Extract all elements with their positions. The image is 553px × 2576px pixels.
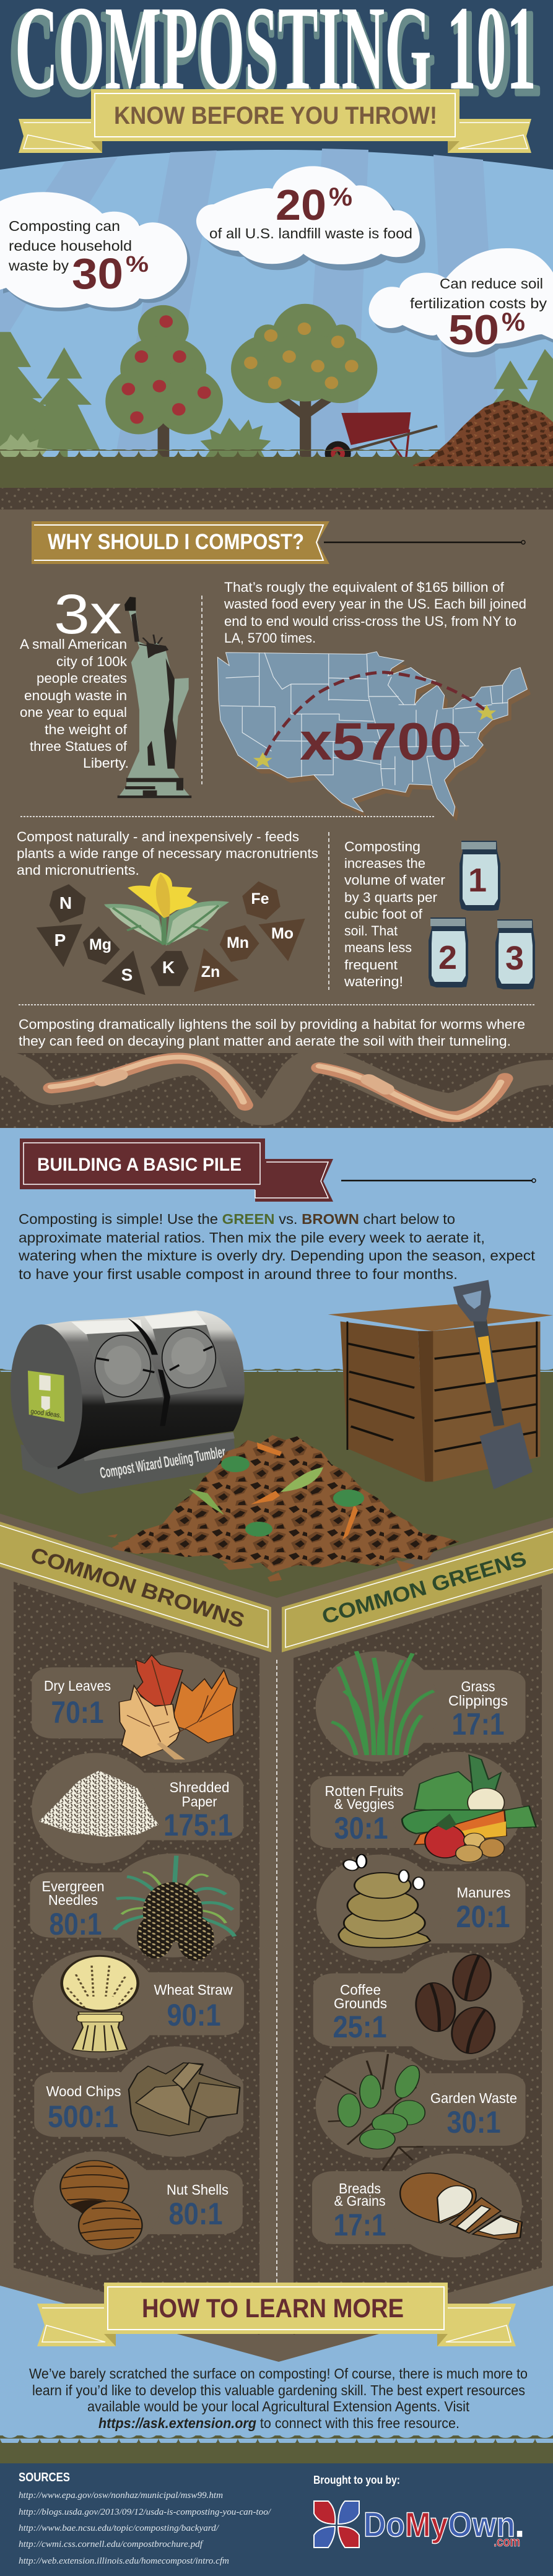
cloud: fertilization stat: [369, 248, 553, 357]
item: evergreen needles: Evergreen: [42, 1878, 104, 1894]
panel: browns dotted background: [14, 1582, 259, 2335]
text: water volume: means less: [344, 940, 412, 955]
text: bills end to end: That’s rougly the equivalent of $165 billion of: [224, 579, 505, 595]
ground strip: [0, 449, 553, 488]
item: rotten fruits and veggies: 30:1: [334, 1811, 388, 1845]
carrots and greens: [189, 1442, 364, 1540]
cloud: household waste stat: [0, 192, 190, 311]
cloud: landfill stat: %: [329, 182, 352, 211]
sources list: http://cwmi.css.cornell.edu/compostbrochure.pdf: [19, 2539, 204, 2549]
diagram: flower and nutrient stones: Fe: [251, 890, 269, 908]
icon: apple tree: [105, 305, 223, 462]
sky: building section: [0, 1128, 553, 1376]
item: shredded paper: [39, 1771, 233, 1842]
text: bills end to end: [224, 579, 526, 646]
stat: statue of liberty: one year to equal: [20, 705, 127, 720]
item: coffee grounds: Grounds: [334, 1995, 387, 2011]
item: shredded paper: 175:1: [163, 1808, 233, 1842]
sources list: http://blogs.usda.gov/2013/09/12/usda-is-composting-you-can-too/: [19, 2507, 272, 2517]
dashed vertical divider: [201, 596, 202, 784]
text: water volume: soil. That: [344, 923, 398, 939]
text: water volume: by 3 quarts per: [344, 890, 437, 905]
icon: leaf pile: [107, 1435, 459, 1582]
item: shredded paper: Shredded: [170, 1779, 229, 1795]
ground: building section: [0, 1369, 553, 1613]
arc: NY to LA: [265, 672, 485, 755]
ribbon: know before you throw: [19, 89, 531, 153]
soil strip with worms: [0, 1053, 553, 1128]
item: dry leaves: [44, 1655, 237, 1759]
panel: why should I compost: [0, 510, 553, 1053]
icon: jar 3: [495, 919, 535, 989]
stat: statue of liberty: city of 100k: [56, 654, 128, 669]
heading banner: building a basic pile: BUILDING A BASIC PILE: [37, 1155, 242, 1175]
item: garden waste: [324, 2054, 517, 2170]
diagram: flower and nutrient stones: S: [121, 965, 133, 984]
header background: [0, 0, 553, 186]
item: breads and grains: Breads: [339, 2180, 381, 2197]
item: nut shells: [60, 2161, 229, 2250]
text: composting is simple: approximate material ratios. Then mix the pile every week to aerate it,: [19, 1229, 485, 1246]
item: breads and grains: [333, 2173, 522, 2242]
text: water volume: cubic foot of: [344, 906, 423, 922]
text: worms: they can feed on decaying plant matter and aerate the soil with their tunneling.: [19, 1033, 511, 1049]
item: coffee grounds: Coffee: [340, 1982, 381, 1998]
heading banner: building a basic pile: [20, 1138, 536, 1202]
cloud: household waste stat: waste by: [8, 258, 69, 274]
worm tunnel: [0, 1060, 553, 1113]
cloud: landfill stat: 20: [276, 181, 326, 229]
logo: DoMyOwn: .com: [494, 2534, 520, 2549]
ribbon: common greens: COMMON GREENS: [320, 1547, 529, 1629]
icon: flower: [104, 872, 229, 946]
item: evergreen needles: Needles: [48, 1892, 98, 1908]
cloud: household waste stat: Composting can: [9, 218, 120, 234]
stat: statue of liberty: Liberty.: [83, 755, 129, 771]
ribbon: how to learn more: HOW TO LEARN MORE: [142, 2294, 404, 2323]
icon: compost tumbler: [5, 1311, 245, 1494]
icon: jar 2: [429, 917, 468, 987]
icon: jar 3: 3: [505, 940, 524, 977]
icon: compost heap: [413, 400, 553, 466]
text: water volume: increases the: [344, 856, 425, 871]
cloud: fertilization stat: Can reduce soil: [440, 275, 543, 292]
text: composting is simple: Composting is simple! Use the GREEN vs. BROWN chart below to: [19, 1211, 455, 1227]
icon: jar 1: [459, 841, 500, 911]
icon: jar 1: 1: [468, 862, 487, 899]
text: learn more paragraph: available would be your local Agricultural Extension Agents. Visit: [87, 2398, 470, 2414]
item: garden waste: Garden Waste: [430, 2090, 517, 2106]
diagram: flower and nutrient stones: [37, 872, 305, 995]
item: wood chips: [46, 2063, 240, 2136]
text: nutrients: [17, 829, 318, 878]
text: composting is simple: watering when the mixture is overly dry. Depending upon the season, expect: [18, 1247, 536, 1264]
panel: greens dotted background: [294, 1585, 542, 2335]
logo: DoMyOwn: DoMyOwn.: [364, 2505, 524, 2544]
text: nutrients: and micronutrients.: [17, 862, 139, 878]
icon: wooden compost bin: [328, 1304, 553, 1481]
icon: statue: [118, 597, 191, 798]
text: worms: Composting dramatically lightens the soil by providing a habitat for worms where: [19, 1017, 525, 1032]
soil strip: [0, 488, 553, 510]
text: nutrients: Compost naturally - and inexpensively - feeds: [17, 829, 299, 844]
icon: shovel: [453, 1280, 533, 1490]
sources list: http://www.epa.gov/osw/nonhaz/municipal/msw99.htm: [19, 2491, 223, 2500]
ground: bottom: [0, 2435, 553, 2464]
cloud: fertilization stat: fertilization costs by: [410, 295, 547, 311]
stat: statue of liberty: A small American: [20, 636, 127, 652]
cloud: fertilization stat: 50: [448, 306, 499, 353]
stat: statue of liberty: 3x: [54, 584, 122, 646]
icon: compost tumbler: Compost Wizard Dueling Tumbler: [98, 1443, 227, 1482]
item: garden waste: 30:1: [447, 2105, 500, 2140]
item: grass clippings: [331, 1651, 508, 1755]
item: wheat straw: [60, 1955, 233, 2052]
worm 1: [51, 1057, 245, 1105]
map: United States x5700: [217, 652, 531, 821]
item: rotten fruits and veggies: Rotten Fruits: [324, 1783, 404, 1799]
ribbon: common greens: [282, 1528, 553, 1652]
text: bills end to end: end to end would criss-cross the US, from NY to: [224, 614, 516, 629]
item: nut shells: Nut Shells: [167, 2182, 229, 2198]
icon: compost tumbler: good ideas.: [30, 1408, 62, 1420]
item: evergreen needles: 80:1: [50, 1907, 102, 1941]
diagram: flower and nutrient stones: Mg: [89, 936, 111, 953]
item: shredded paper: Paper: [182, 1793, 217, 1810]
item: dry leaves: 70:1: [51, 1695, 104, 1730]
landscape: trees and wheelbarrow: [0, 304, 553, 466]
brought to you by: Brought to you by:: [313, 2474, 400, 2486]
text: bills end to end: wasted food every year in the US. Each bill joined: [224, 596, 526, 612]
item: wheat straw: Wheat Straw: [154, 1982, 233, 1998]
item: evergreen needles: [42, 1855, 235, 1961]
sources list: http://www.bae.ncsu.edu/topic/composting/backyard/: [19, 2523, 220, 2533]
heading banner: [32, 521, 525, 564]
worm 2: [319, 1066, 505, 1117]
text: composting is simple: to have your first usable compost in around three to four months.: [19, 1266, 458, 1282]
text: water volume: frequent: [344, 957, 398, 973]
item: grass clippings: Grass: [461, 1678, 495, 1694]
diagram: flower and nutrient stones: Mo: [271, 925, 294, 942]
text: worms: [19, 1017, 525, 1049]
item: rotten fruits and veggies: & Veggies: [334, 1796, 394, 1812]
sky with sun rays: [0, 149, 553, 461]
text: learn more paragraph: https://ask.extension.org to connect with this free resource.: [98, 2415, 459, 2431]
icon: wheelbarrow: [325, 412, 437, 466]
item: grass clippings: 17:1: [452, 1707, 504, 1741]
text: learn more paragraph: [29, 2366, 528, 2431]
diagram: flower and nutrient stones: K: [162, 958, 175, 977]
text: bills end to end: LA, 5700 times.: [224, 630, 316, 646]
sources list: [19, 2471, 272, 2566]
ribbon: know before you throw: KNOW BEFORE YOU THROW!: [114, 102, 437, 129]
item: manures: [339, 1855, 510, 1948]
cloud: fertilization stat: %: [502, 307, 525, 336]
item: breads and grains: 17:1: [333, 2208, 386, 2242]
map: United States x5700: x5700: [300, 713, 462, 771]
panel: browns and greens backing: [0, 1514, 553, 2362]
text: water volume: Composting: [344, 839, 420, 854]
item: nut shells: 80:1: [168, 2197, 223, 2231]
logo: DoMyOwn: [314, 2501, 524, 2549]
cloud: household waste stat: reduce household: [9, 238, 132, 254]
stat: statue of liberty: the weight of: [45, 722, 128, 737]
text: composting is simple: [18, 1211, 536, 1282]
heading banner: WHY SHOULD I COMPOST?: [48, 530, 304, 554]
item: wood chips: Wood Chips: [46, 2083, 121, 2099]
item: coffee grounds: 25:1: [333, 2010, 386, 2044]
ribbon: how to learn more: [37, 2283, 516, 2346]
item: coffee grounds: [333, 1954, 499, 2055]
item: dry leaves: Dry Leaves: [44, 1678, 111, 1694]
stat: statue of liberty: [20, 584, 191, 798]
text: water volume: watering!: [344, 974, 403, 989]
text: nutrients: plants a wide range of necessary macronutrients: [17, 846, 318, 861]
icon: orange tree: [231, 304, 377, 462]
stat: statue of liberty: enough waste in: [24, 688, 127, 703]
item: wheat straw: 90:1: [167, 1998, 220, 2032]
item: grass clippings: Clippings: [448, 1693, 508, 1709]
cloud: landfill stat: [196, 166, 425, 271]
text: learn more paragraph: learn if you’d like to develop this valuable gardening skill. The best expert resources: [32, 2382, 525, 2398]
text: water volume: volume of water: [344, 872, 445, 888]
sources list: http://web.extension.illinois.edu/homecompost/intro.cfm: [19, 2556, 229, 2566]
cloud: landfill stat: of all U.S. landfill waste is food: [209, 225, 412, 241]
stat: statue of liberty: people creates: [37, 670, 127, 686]
item: breads and grains: & Grains: [334, 2193, 385, 2209]
diagram: flower and nutrient stones: Mn: [227, 934, 249, 952]
stat: statue of liberty: three Statues of: [30, 739, 128, 754]
cloud: household waste stat: %: [126, 251, 149, 277]
item: manures: Manures: [457, 1884, 510, 1901]
diagram: flower and nutrient stones: P: [54, 930, 66, 950]
icon: pine trees: [0, 332, 553, 462]
text: learn more paragraph: We’ve barely scratched the surface on composting! Of course, there is much more to: [29, 2366, 528, 2382]
sources list: SOURCES: [19, 2471, 70, 2484]
cloud: household waste stat: 30: [72, 249, 123, 298]
item: rotten fruits and veggies: [324, 1755, 536, 1862]
footer: [0, 2463, 553, 2576]
diagram: flower and nutrient stones: N: [59, 893, 72, 913]
ribbon: common browns: [0, 1522, 271, 1652]
blob backgrounds, browns and greens: [30, 1651, 526, 2257]
diagram: flower and nutrient stones: Zn: [201, 963, 220, 981]
icon: jar 2: 2: [438, 939, 457, 976]
sky: bottom section: [0, 2286, 553, 2445]
ribbon: common browns: COMMON BROWNS: [28, 1543, 247, 1633]
item: manures: 20:1: [456, 1899, 510, 1934]
icon: bushes: [0, 418, 271, 466]
text: water volume: [344, 839, 445, 989]
icon: stones: [37, 884, 189, 995]
item: wood chips: 500:1: [48, 2099, 118, 2134]
